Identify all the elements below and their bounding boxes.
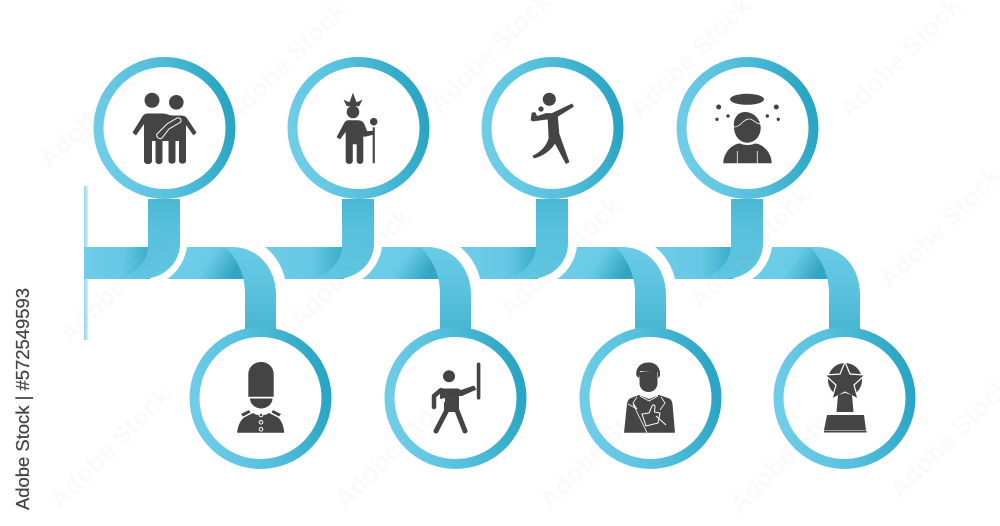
ring 4 (682, 62, 814, 194)
faint watermark: Adobe Stock (33, 40, 167, 174)
stock id text: Adobe Stock | #572549593 (13, 288, 33, 510)
faint watermark: Adobe Stock (328, 380, 462, 514)
connector 4 lower (752, 247, 860, 335)
connector 3 lower (557, 247, 666, 335)
faint watermark: Adobe Stock (723, 385, 857, 519)
connector 1 lower (167, 247, 276, 335)
connector 2 upper (265, 199, 374, 279)
icon: person with halo (715, 94, 780, 164)
icon: royal guard (237, 362, 284, 433)
icon: star trophy (824, 362, 866, 432)
icon: two friends (132, 93, 196, 164)
ring 2 (292, 62, 424, 194)
left rail (84, 186, 88, 340)
connector 4 upper (655, 199, 763, 279)
ring 8 (778, 332, 910, 464)
faint watermark: Adobe Stock (43, 380, 177, 514)
ring 3 (486, 62, 618, 194)
faint watermark: Adobe Stock (283, 200, 417, 334)
faint watermark: Adobe Stock (493, 190, 627, 324)
ring 1 (98, 62, 230, 194)
icon: man with thumbs up (624, 362, 675, 433)
faint watermark: Adobe Stock (53, 215, 187, 349)
connector 3 upper (460, 199, 568, 279)
connector 2 lower (362, 247, 471, 335)
ring 6 (390, 332, 522, 464)
ring 7 (584, 332, 716, 464)
icon: volleyball player (531, 93, 574, 164)
faint watermark: Adobe Stock (533, 380, 667, 514)
faint watermark: Adobe Stock (683, 180, 817, 314)
icon: batter (434, 362, 480, 431)
connector 1 upper (84, 199, 180, 279)
icon: king with staff (337, 94, 377, 164)
ring 5 (194, 332, 326, 464)
